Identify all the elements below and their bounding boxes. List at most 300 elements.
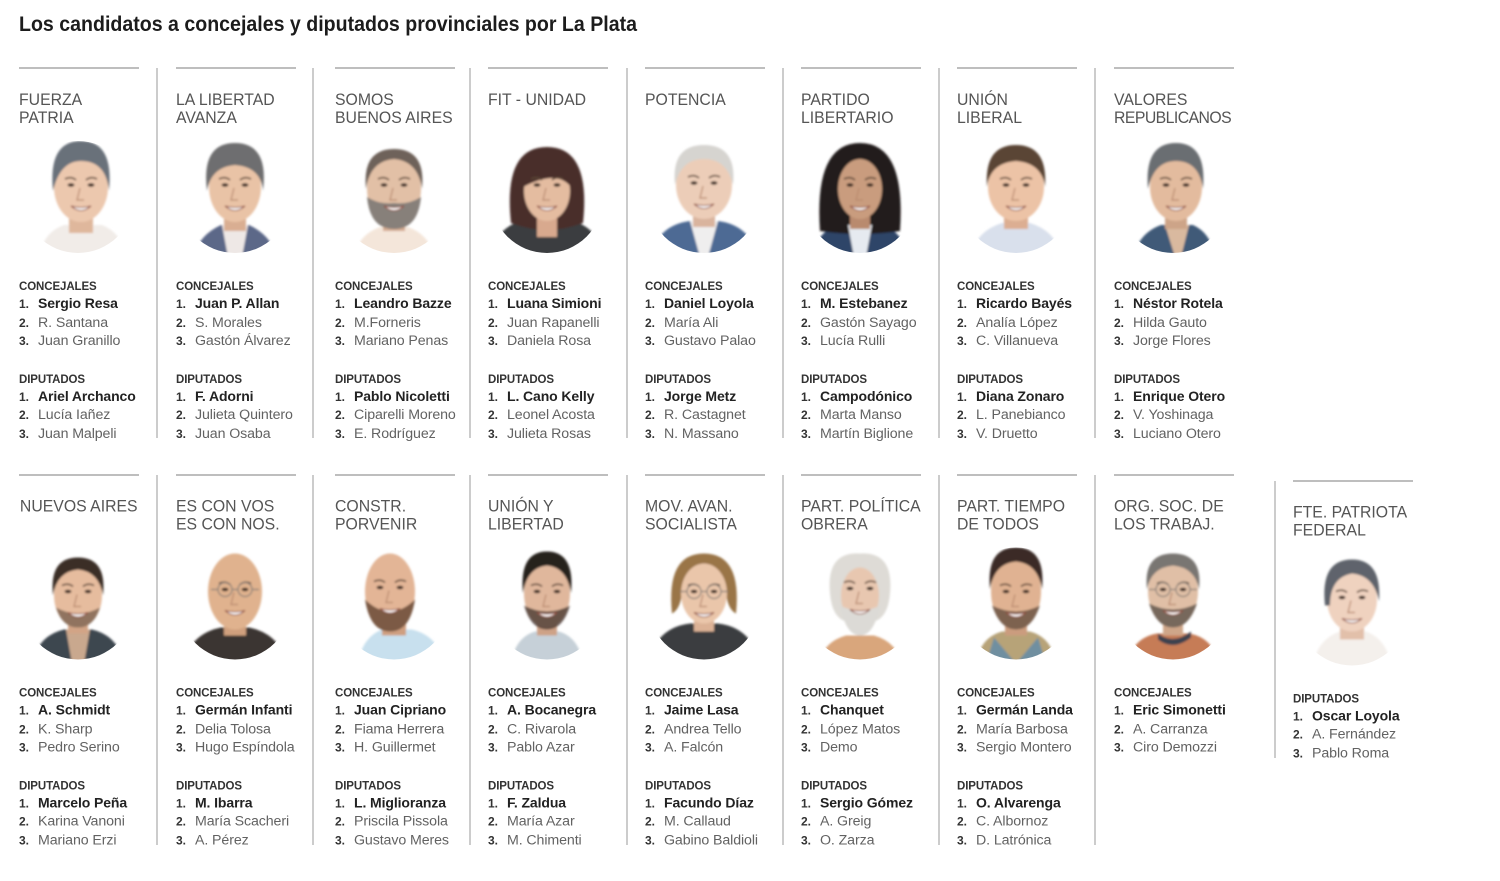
portrait — [361, 552, 434, 660]
concejales list: 3. — [335, 740, 345, 754]
diputados list: 2. — [1293, 728, 1303, 742]
concejales list: Hugo Espíndola — [195, 740, 295, 756]
diputados list: Martín Biglione — [820, 426, 913, 442]
concejales list: 1. — [19, 704, 29, 718]
concejales list: 1. — [801, 297, 811, 311]
concejales list: Daniel Loyola — [664, 295, 754, 311]
concejales list: 2. — [335, 316, 345, 330]
diputados list: 2. — [19, 814, 29, 828]
diputados list: DIPUTADOS — [645, 374, 711, 386]
concejales list: 1. — [176, 704, 186, 718]
concejales list: Gastón Álvarez — [195, 332, 291, 349]
diputados list: 1. — [19, 390, 29, 404]
concejales list: Delia Tolosa — [195, 722, 271, 738]
diputados list: DIPUTADOS — [176, 374, 242, 386]
panel: Somos Buenos Aires — [335, 68, 456, 442]
diputados list: Karina Vanoni — [38, 814, 125, 830]
diputados list: O. Zarza — [820, 832, 875, 848]
diputados list: A. Greig — [820, 814, 871, 830]
panel: FIT - Unidad — [488, 68, 608, 442]
concejales list: CONCEJALES — [335, 688, 413, 700]
portrait — [1138, 142, 1210, 253]
diputados list: 3. — [335, 834, 345, 848]
diputados list: 2. — [957, 408, 967, 422]
concejales list: Germán Landa — [976, 702, 1073, 718]
concejales list: 3. — [335, 334, 345, 348]
diputados list: 3. — [645, 834, 655, 848]
diputados list — [1114, 374, 1225, 442]
concejales list: 3. — [801, 740, 811, 754]
diputados list: E. Rodríguez — [354, 426, 436, 442]
diputados list: 1. — [957, 796, 967, 810]
concejales list — [1114, 281, 1223, 349]
heading: OBRERA — [801, 515, 868, 534]
diputados list: Campodónico — [820, 388, 912, 404]
diputados list — [801, 780, 913, 848]
concejales list: A. Schmidt — [38, 702, 111, 718]
heading: PORVENIR — [335, 515, 417, 534]
concejales list: 2. — [1114, 316, 1124, 330]
heading: PATRIA — [19, 109, 74, 127]
concejales list — [488, 281, 601, 349]
concejales list: Andrea Tello — [664, 722, 742, 738]
concejales list: Juan P. Allan — [195, 295, 279, 311]
heading: AVANZA — [176, 109, 237, 127]
diputados list: DIPUTADOS — [1293, 694, 1359, 706]
concejales list: 1. — [645, 704, 655, 718]
diputados list: 2. — [176, 408, 186, 422]
diputados list — [335, 374, 456, 442]
concejales list: 3. — [19, 334, 29, 348]
concejales list: Pedro Serino — [38, 740, 120, 756]
panel: Org. Soc. de los Trabaj. — [1114, 475, 1234, 756]
concejales list: 3. — [176, 334, 186, 348]
panel: Valores Republicanos — [1114, 68, 1234, 442]
diputados list: A. Fernández — [1312, 726, 1396, 742]
concejales list: CONCEJALES — [488, 281, 566, 293]
concejales list: CONCEJALES — [957, 281, 1035, 293]
panel: Nuevos Aires — [19, 475, 139, 848]
diputados list: V. Yoshinaga — [1133, 407, 1214, 423]
portrait — [193, 552, 277, 660]
diputados list: Lucía Iañez — [38, 407, 110, 423]
concejales list: 2. — [488, 316, 498, 330]
diputados list: M. Chimenti — [507, 832, 582, 848]
diputados list: 1. — [335, 796, 345, 810]
diputados list: Ciparelli Moreno — [354, 407, 456, 423]
diputados list: 3. — [801, 834, 811, 848]
portrait — [978, 143, 1054, 253]
diputados list: M. Callaud — [664, 814, 731, 830]
title: Los candidatos a concejales y diputados provinciales por La Plata — [19, 13, 637, 36]
concejales list: CONCEJALES — [1114, 688, 1192, 700]
concejales list — [957, 688, 1073, 756]
concejales list — [957, 281, 1072, 349]
diputados list: 2. — [335, 408, 345, 422]
concejales list: Pablo Azar — [507, 740, 575, 756]
concejales list: Gustavo Palao — [664, 333, 756, 349]
concejales list: 2. — [801, 722, 811, 736]
diputados list: 2. — [645, 814, 655, 828]
heading: MOV. AVAN. — [645, 497, 733, 516]
portrait — [824, 552, 896, 660]
concejales list — [488, 688, 596, 756]
diputados list: 3. — [176, 834, 186, 848]
concejales list: CONCEJALES — [801, 281, 879, 293]
diputados list: DIPUTADOS — [335, 780, 401, 792]
heading: DE TODOS — [957, 515, 1039, 534]
diputados list: L. Cano Kelly — [507, 388, 595, 404]
diputados list — [488, 374, 595, 442]
concejales list: H. Guillermet — [354, 740, 436, 756]
diputados list: 1. — [801, 796, 811, 810]
panel: Unión y Libertad — [488, 475, 608, 848]
diputados list: 2. — [645, 408, 655, 422]
concejales list: 1. — [1114, 704, 1124, 718]
concejales list: 1. — [957, 297, 967, 311]
concejales list: Lucía Rulli — [820, 333, 885, 349]
concejales list: 3. — [488, 740, 498, 754]
diputados list — [176, 374, 293, 442]
diputados list: DIPUTADOS — [176, 780, 242, 792]
diputados list — [19, 780, 127, 848]
concejales list: 1. — [335, 704, 345, 718]
concejales list: C. Villanueva — [976, 333, 1058, 349]
concejales list: Gastón Sayago — [820, 315, 917, 331]
heading: ORG. SOC. DE — [1114, 497, 1224, 516]
portrait — [1134, 552, 1212, 660]
heading: POTENCIA — [645, 91, 726, 109]
concejales list: Juan Rapanelli — [507, 315, 599, 331]
diputados list — [645, 780, 758, 848]
concejales list: Daniela Rosa — [507, 333, 591, 349]
concejales list — [645, 281, 756, 349]
portrait — [44, 141, 118, 253]
diputados list: 1. — [488, 796, 498, 810]
diputados list: DIPUTADOS — [19, 780, 85, 792]
diputados list: O. Alvarenga — [976, 794, 1061, 810]
concejales list: CONCEJALES — [645, 281, 723, 293]
concejales list: Ciro Demozzi — [1133, 740, 1217, 756]
heading: UNIÓN Y — [488, 496, 554, 516]
portrait — [818, 141, 902, 253]
heading: LOS TRABAJ. — [1114, 515, 1215, 534]
concejales list: R. Santana — [38, 315, 108, 331]
diputados list: 1. — [19, 796, 29, 810]
diputados list: Gabino Baldioli — [664, 832, 758, 848]
diputados list: 2. — [801, 408, 811, 422]
concejales list: Demo — [820, 740, 858, 756]
diputados list: Juan Osaba — [195, 426, 271, 442]
concejales list: 3. — [176, 740, 186, 754]
concejales list: A. Carranza — [1133, 722, 1208, 738]
concejales list: 2. — [488, 722, 498, 736]
diputados list: 1. — [1114, 390, 1124, 404]
diputados list: C. Albornoz — [976, 814, 1048, 830]
panel: Fte. Patriota Federal — [1293, 481, 1413, 762]
concejales list: 2. — [335, 722, 345, 736]
diputados list: 1. — [335, 390, 345, 404]
diputados list: DIPUTADOS — [957, 780, 1023, 792]
concejales list: Jaime Lasa — [664, 702, 739, 718]
diputados list: 3. — [19, 834, 29, 848]
panel: Potencia — [645, 68, 765, 442]
diputados list: 2. — [1114, 408, 1124, 422]
diputados list: V. Druetto — [976, 426, 1038, 442]
diputados list: 3. — [957, 834, 967, 848]
diputados list: DIPUTADOS — [801, 374, 867, 386]
concejales list: 3. — [957, 740, 967, 754]
diputados list: 1. — [176, 796, 186, 810]
heading: UNIÓN — [957, 89, 1008, 109]
diputados list: Sergio Gómez — [820, 794, 913, 810]
concejales list: M. Estebanez — [820, 295, 908, 311]
heading: REPUBLICANOS — [1114, 109, 1232, 127]
diputados list — [957, 780, 1061, 848]
heading: LA LIBERTAD — [176, 91, 275, 109]
concejales list: A. Bocanegra — [507, 702, 596, 718]
diputados list: Julieta Rosas — [507, 426, 591, 442]
diputados list: 1. — [488, 390, 498, 404]
diputados list: 3. — [335, 427, 345, 441]
diputados list: 2. — [335, 814, 345, 828]
diputados list: 1. — [957, 390, 967, 404]
panel: Constr. Porvenir — [335, 475, 455, 848]
concejales list: 3. — [957, 334, 967, 348]
concejales list: Eric Simonetti — [1133, 702, 1226, 718]
heading: CONSTR. — [335, 497, 406, 516]
concejales list: CONCEJALES — [335, 281, 413, 293]
diputados list: Oscar Loyola — [1312, 708, 1400, 724]
concejales list: María Barbosa — [976, 722, 1068, 738]
diputados list: DIPUTADOS — [335, 374, 401, 386]
heading: LIBERTAD — [488, 515, 564, 534]
panel: Mov. Avan. Socialista — [645, 475, 765, 848]
concejales list — [1114, 688, 1226, 756]
heading: FEDERAL — [1293, 521, 1366, 540]
concejales list: 2. — [645, 722, 655, 736]
diputados list: Diana Zonaro — [976, 388, 1064, 404]
diputados list: 1. — [801, 390, 811, 404]
heading: SOMOS — [335, 91, 394, 109]
heading: FIT - UNIDAD — [488, 91, 586, 109]
diputados list: Facundo Díaz — [664, 794, 754, 810]
heading: FTE. PATRIOTA — [1293, 503, 1407, 522]
concejales list: CONCEJALES — [176, 688, 254, 700]
diputados list: 1. — [645, 796, 655, 810]
concejales list: 1. — [645, 297, 655, 311]
panel: Unión Liberal — [957, 68, 1077, 442]
panel: La Libertad Avanza — [176, 68, 296, 442]
diputados list — [19, 374, 136, 442]
diputados list: DIPUTADOS — [1114, 374, 1180, 386]
concejales list: Luana Simioni — [507, 295, 601, 311]
concejales list: 1. — [1114, 297, 1124, 311]
heading: PARTIDO — [801, 91, 870, 109]
concejales list: M.Forneris — [354, 315, 421, 331]
diputados list: 3. — [176, 427, 186, 441]
diputados list: D. Latrónica — [976, 832, 1052, 848]
diputados list — [1293, 694, 1400, 762]
concejales list: 1. — [488, 297, 498, 311]
concejales list: 2. — [957, 722, 967, 736]
panel: Part. Tiempo de Todos — [957, 475, 1077, 848]
concejales list: 1. — [801, 704, 811, 718]
diputados list: Luciano Otero — [1133, 426, 1221, 442]
concejales list: 1. — [176, 297, 186, 311]
concejales list: 1. — [488, 704, 498, 718]
concejales list: 3. — [645, 740, 655, 754]
diputados list: Pablo Nicoletti — [354, 388, 450, 404]
concejales list: CONCEJALES — [19, 281, 97, 293]
diputados list: Leonel Acosta — [507, 407, 595, 423]
concejales list: CONCEJALES — [176, 281, 254, 293]
diputados list: A. Pérez — [195, 832, 249, 848]
diputados list: 1. — [645, 390, 655, 404]
concejales list: Ricardo Bayés — [976, 295, 1072, 311]
concejales list: 3. — [19, 740, 29, 754]
heading: VALORES — [1114, 91, 1188, 109]
concejales list — [645, 688, 742, 756]
portrait — [1316, 558, 1388, 666]
portrait — [980, 548, 1052, 660]
diputados list: 2. — [488, 814, 498, 828]
concejales list: 3. — [801, 334, 811, 348]
diputados list: Mariano Erzi — [38, 832, 116, 848]
concejales list: 2. — [176, 316, 186, 330]
concejales list — [335, 688, 446, 756]
diputados list: DIPUTADOS — [801, 780, 867, 792]
portrait — [200, 142, 270, 253]
diputados list: Marta Manso — [820, 407, 902, 423]
concejales list: A. Falcón — [664, 740, 723, 756]
diputados list: María Scacheri — [195, 814, 289, 830]
diputados list: 3. — [488, 834, 498, 848]
diputados list: 2. — [488, 408, 498, 422]
diputados list: 3. — [957, 427, 967, 441]
heading: FUERZA — [19, 91, 82, 109]
concejales list — [801, 281, 917, 349]
concejales list — [176, 688, 295, 756]
diputados list: Pablo Roma — [1312, 746, 1389, 762]
concejales list: 3. — [488, 334, 498, 348]
concejales list: Chanquet — [820, 702, 884, 718]
concejales list: 2. — [1114, 722, 1124, 736]
diputados list — [176, 780, 289, 848]
diputados list: 2. — [176, 814, 186, 828]
concejales list: 2. — [19, 722, 29, 736]
diputados list: L. Panebianco — [976, 407, 1066, 423]
diputados list: Priscila Pissola — [354, 814, 448, 830]
panel: Fuerza Patria — [19, 68, 139, 442]
concejales list: 1. — [335, 297, 345, 311]
diputados list — [801, 374, 913, 442]
concejales list: Analía López — [976, 315, 1058, 331]
diputados list: DIPUTADOS — [488, 780, 554, 792]
concejales list: CONCEJALES — [957, 688, 1035, 700]
panel: Part. Política Obrera — [801, 475, 921, 848]
diputados list: DIPUTADOS — [19, 374, 85, 386]
concejales list: CONCEJALES — [645, 688, 723, 700]
concejales list: 2. — [957, 316, 967, 330]
concejales list — [19, 281, 121, 349]
diputados list — [957, 374, 1066, 442]
heading: NUEVOS AIRES — [20, 497, 138, 516]
portrait — [360, 148, 428, 253]
diputados list: L. Miglioranza — [354, 794, 446, 810]
concejales list: K. Sharp — [38, 722, 93, 738]
diputados list: DIPUTADOS — [957, 374, 1023, 386]
diputados list: Marcelo Peña — [38, 794, 127, 810]
concejales list: CONCEJALES — [488, 688, 566, 700]
heading: ES CON VOS — [176, 497, 274, 516]
diputados list: N. Massano — [664, 426, 739, 442]
concejales list: Sergio Resa — [38, 295, 118, 311]
concejales list: Juan Granillo — [38, 333, 121, 349]
concejales list: Juan Cipriano — [354, 702, 446, 718]
concejales list: CONCEJALES — [801, 688, 879, 700]
diputados list: F. Zaldua — [507, 794, 566, 810]
concejales list: Germán Infanti — [195, 702, 292, 718]
diputados list: 3. — [488, 427, 498, 441]
concejales list: María Ali — [664, 315, 718, 331]
diputados list: 3. — [1114, 427, 1124, 441]
concejales list: CONCEJALES — [19, 688, 97, 700]
heading: BUENOS AIRES — [335, 109, 453, 127]
concejales list: Néstor Rotela — [1133, 295, 1223, 311]
diputados list: R. Castagnet — [664, 407, 746, 423]
diputados list — [335, 780, 449, 848]
concejales list: 2. — [645, 316, 655, 330]
diputados list: 2. — [801, 814, 811, 828]
diputados list: M. Ibarra — [195, 794, 253, 810]
heading: PART. POLÍTICA — [801, 496, 921, 516]
concejales list — [335, 281, 452, 349]
heading: ES CON NOS. — [176, 515, 280, 534]
diputados list: 1. — [176, 390, 186, 404]
diputados list: 2. — [957, 814, 967, 828]
portrait — [661, 144, 747, 253]
portrait — [502, 145, 592, 253]
concejales list — [176, 281, 291, 349]
concejales list: 2. — [19, 316, 29, 330]
diputados list: 3. — [1293, 746, 1303, 760]
concejales list: Jorge Flores — [1133, 333, 1211, 349]
heading: LIBERTARIO — [801, 109, 894, 127]
diputados list: 2. — [19, 408, 29, 422]
concejales list: 3. — [1114, 334, 1124, 348]
concejales list: 2. — [176, 722, 186, 736]
concejales list: 3. — [645, 334, 655, 348]
concejales list: Hilda Gauto — [1133, 315, 1207, 331]
concejales list: S. Morales — [195, 315, 262, 331]
column dividers — [157, 68, 1275, 845]
panel: Es Con Vos Es Con Nos — [176, 475, 296, 848]
concejales list: Leandro Bazze — [354, 295, 452, 311]
portrait — [659, 552, 749, 660]
concejales list: Fiama Herrera — [354, 722, 444, 738]
heading: PART. TIEMPO — [957, 497, 1065, 516]
diputados list: 3. — [19, 427, 29, 441]
diputados list: 3. — [801, 427, 811, 441]
diputados list: María Azar — [507, 814, 575, 830]
concejales list: CONCEJALES — [1114, 281, 1192, 293]
concejales list: Mariano Penas — [354, 333, 448, 349]
panel: Partido Libertario — [801, 68, 921, 442]
concejales list — [801, 688, 900, 756]
concejales list: 1. — [957, 704, 967, 718]
diputados list: Julieta Quintero — [195, 407, 293, 423]
